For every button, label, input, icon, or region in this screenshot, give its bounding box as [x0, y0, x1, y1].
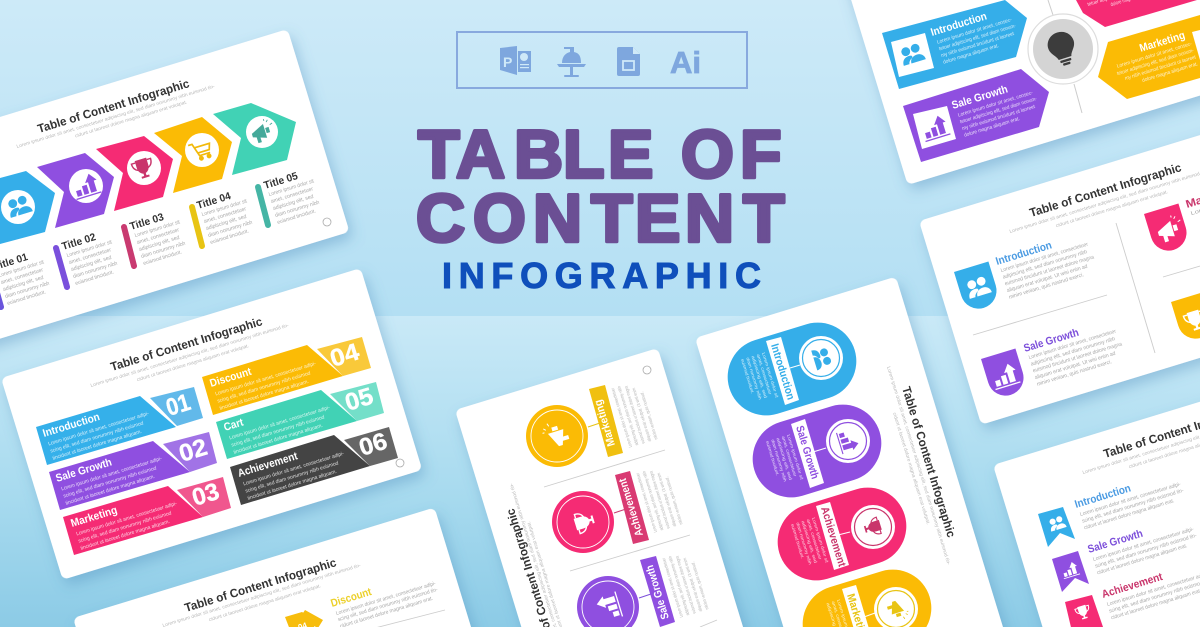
item: marketing circle: aliquam erat volutpat. Ut wisi enim [631, 387, 652, 442]
title 01 column [0, 247, 54, 307]
title 05 column: diam nonummy nibh [274, 200, 320, 219]
item: sale growth circle: euismod tincidunt ut laoreet dolore magna [674, 555, 697, 614]
title 02 column: Title 02 [60, 231, 97, 253]
hexagon 3: trophy [96, 136, 173, 211]
background upper band [0, 0, 1200, 316]
ribbon 06 achievement: tincidunt ut laoreet dolore magna aliquam. [247, 469, 338, 502]
pill: achievement: adipiscing elit, sed [801, 520, 818, 564]
title 05 column: Title 05 [262, 170, 299, 192]
item: sale growth circle: aliquam erat volutpat. Ut wisi enim [682, 557, 703, 612]
item: sale growth circle: Sale Growth [644, 563, 672, 621]
pill: introduction: adipiscing elit, sed [751, 355, 768, 399]
ribbon 03 marketing [63, 477, 231, 555]
ribbon 04 discount: tincidunt ut laoreet dolore magna aliquam. [219, 379, 310, 412]
title 04 column: amet, consectetuer [203, 206, 247, 225]
item: marketing circle: minim veniam, quis nostrud. [639, 391, 659, 440]
icon: Keynote [557, 47, 586, 77]
pill: introduction [718, 313, 866, 425]
item: achievement circle: minim veniam, quis nostrud. [664, 476, 684, 525]
title 05 column: adipiscing elit, sed [272, 194, 314, 212]
blue tab: introduction: dolore magna aliquam erat. [942, 43, 1000, 66]
item: marketing circle: adipiscing elit, sed diam nonummy nibh [616, 385, 639, 446]
hexagon 2: chart [37, 153, 114, 228]
title 01 column: diam nonummy nibh [4, 281, 50, 300]
yellow tab: marketing: Marketing [1138, 30, 1187, 55]
ribbon 01 introduction: tincidunt ut laoreet dolore magna aliquam. [52, 429, 143, 462]
heading: shield slide: Table of Content Infographic [1028, 160, 1183, 220]
ribbon 06 achievement: Achievement [236, 450, 299, 480]
pill: introduction: amet, consectetuer [756, 353, 773, 396]
title 05 column: amet, consectetuer [270, 186, 314, 205]
pill: achievement: amet, consectetuer [806, 518, 823, 561]
title 03 column: amet, consectetuer [136, 227, 180, 246]
item: achievement circle: Achievement [617, 476, 646, 538]
item: introduction shield: euismod tincidunt ut laoreet dolore magna [1004, 254, 1095, 287]
pill: sale growth: Lorem ipsum dolor sit [786, 434, 805, 481]
ribbon 03 marketing: Marketing [69, 504, 119, 530]
ribbon 01 introduction: Introduction [41, 411, 102, 440]
title 05 column [258, 166, 324, 226]
pill: achievement [768, 478, 916, 590]
item: sale growth circle: minim veniam, quis nostrud. [690, 561, 710, 610]
pill: sale growth: adipiscing elit, sed [776, 437, 793, 481]
icon: Illustrator: Ai [670, 45, 701, 80]
panel: bookmark slide (bottom right) [993, 371, 1200, 627]
title 05 column: euismod tincidunt. [277, 208, 317, 226]
software icons box [457, 32, 747, 88]
panel: shield slide (right) [919, 104, 1200, 425]
ribbon 01 introduction: Lorem ipsum dolor sit amet, consectetuer adipi- [48, 411, 150, 447]
ribbon 03 marketing: scing elit, sed diam nonummy nibh euismod [78, 510, 172, 545]
title 02 column [56, 227, 122, 287]
item: marketing circle: Marketing [592, 398, 618, 448]
item: sale growth shield: adipiscing elit, sed diam nonummy nibh [1030, 336, 1116, 368]
ribbon 01 introduction: 01 [163, 389, 194, 422]
ribbon 01 introduction [36, 387, 203, 465]
item: achievement circle: aliquam erat volutpat. Ut wisi enim [656, 472, 677, 527]
icon: yellow chevron 04 [285, 610, 323, 627]
item: sale growth shield: Lorem ipsum dolor sit amet, consectetuer [1028, 329, 1117, 361]
item: achievement circle: euismod tincidunt ut laoreet dolore magna [648, 470, 671, 529]
purple tab: sale growth: Lorem ipsum dolor sit amet, consec- [957, 90, 1034, 119]
item: achievement circle: adipiscing elit, sed diam nonummy nibh [641, 470, 664, 531]
item: sale growth shield: euismod tincidunt ut laoreet dolore magna [1032, 341, 1123, 374]
item: sale growth circle [577, 549, 710, 627]
background lower band [0, 316, 1200, 627]
item: introduction shield: adipiscing elit, sed diam nonummy nibh [1002, 249, 1088, 281]
subtitle: hexagon slide: Lorem ipsum dolor sit amet, consectetuer adipiscing elit, sed diam nonummy nibh euismod tin- [16, 84, 216, 150]
item: sale growth bookmark: Lorem ipsum dolor sit amet, consectetuer adipi- [1092, 526, 1195, 563]
title 01 column: adipiscing elit, sed [2, 275, 44, 293]
item: marketing circle: euismod tincidunt ut laoreet dolore magna [623, 385, 646, 444]
item: sale growth circle: adipiscing elit, sed diam nonummy nibh [667, 555, 690, 616]
icon: PowerPoint [500, 46, 531, 75]
item: marketing circle: Lorem ipsum dolor sit amet, consectetuer [610, 387, 633, 448]
ribbon 05 cart: scing elit, sed diam nonummy nibh euismod [231, 414, 325, 449]
item: introduction shield: aliquam erat volutpat. Ut wisi enim ad [1006, 264, 1088, 294]
blue tab: introduction [882, 0, 1027, 89]
item: sale growth shield: aliquam erat volutpat. Ut wisi enim ad [1034, 351, 1116, 381]
heading: pills slide: Table of Content Infographic [899, 385, 959, 539]
heading: hexagon slide: Table of Content Infographic [36, 76, 191, 136]
item: sale growth bookmark: Sale Growth [1086, 528, 1145, 556]
ribbon 05 cart: Lorem ipsum dolor sit amet, consectetuer adipi- [229, 405, 331, 441]
item: introduction bookmark: Introduction [1073, 482, 1133, 511]
item: introduction bookmark [1038, 468, 1187, 547]
title 04 column: diam nonummy nibh [207, 220, 253, 239]
panel: hexagon arrows slide [0, 29, 350, 349]
pill: sale growth: diam nonummy nibh [770, 439, 788, 483]
item: sale growth shield: Sale Growth [1022, 327, 1081, 355]
hexagon 4: cart [154, 117, 232, 193]
title line: TABLE OF: TABLE OF [418, 116, 782, 192]
title 02 column: diam nonummy nibh [72, 261, 118, 280]
ribbon 04 discount: Lorem ipsum dolor sit amet, consectetuer adipi- [215, 361, 317, 397]
item: introduction shield: Lorem ipsum dolor sit amet, consectetuer [1000, 242, 1089, 274]
title 03 column: Lorem ipsum dolor sit [134, 219, 181, 239]
title 05 column: Lorem ipsum dolor sit [268, 178, 315, 198]
title 02 column: adipiscing elit, sed [70, 255, 112, 273]
ribbon 04 discount: Discount [208, 366, 253, 390]
item: trophy shield [1171, 291, 1200, 343]
icon: copyright mark [323, 218, 331, 226]
item: marketing circle [526, 379, 659, 467]
main title [416, 116, 785, 256]
title 04 column: adipiscing elit, sed [205, 214, 247, 232]
title 02 column: Lorem ipsum dolor sit [66, 239, 113, 259]
ribbon 02 sale growth: Sale Growth [54, 456, 114, 485]
title 02 column: amet, consectetuer [68, 247, 112, 266]
pill: achievement: Lorem ipsum dolor sit [811, 517, 830, 564]
yellow tab: marketing: Lorem ipsum dolor sit amet, consec- [1116, 41, 1193, 70]
title 03 column: adipiscing elit, sed [138, 235, 180, 253]
title 03 column: euismod tincidunt. [143, 249, 183, 267]
item: discount [329, 567, 441, 627]
pill: sale growth [743, 395, 891, 507]
ribbon 02 sale growth [49, 432, 217, 510]
item: sale growth circle: Lorem ipsum dolor sit amet, consectetuer [661, 557, 684, 618]
subtitle: shield slide: Lorem ipsum dolor sit amet, consectetuer adipiscing elit, sed diam nonummy nibh euismod tin- [1009, 169, 1200, 235]
item: introduction bookmark: cidunt ut laoreet dolore magna aliquam erat. [1083, 498, 1175, 531]
purple tab: sale growth: my nibh euismod tincidunt ut laoreet [961, 104, 1036, 132]
blue tab: introduction: my nibh euismod tincidunt ut laoreet [940, 31, 1015, 59]
subtitle: discount slide: cidunt ut laoreet dolore magna aliquam erat volutpat. [208, 583, 322, 623]
purple tab: sale growth: dolore magna aliquam erat. [963, 116, 1021, 139]
ribbon 06 achievement: 06 [356, 428, 391, 462]
icon: Google Slides [617, 47, 640, 76]
item: achievement bookmark [1065, 558, 1200, 627]
pill: introduction: euismod tincidunt. [740, 358, 755, 394]
pink tab: top [1076, 0, 1197, 27]
title 03 column [124, 207, 190, 267]
pill: sale growth: amet, consectetuer [781, 435, 798, 478]
title 04 column: Title 04 [195, 190, 232, 212]
blue tab: introduction: Lorem ipsum dolor sit amet, consec- [936, 17, 1013, 46]
item: achievement circle: Lorem ipsum dolor sit amet, consectetuer [635, 472, 658, 533]
ribbon 04 discount: 04 [327, 338, 363, 373]
subtitle: INFOGRAPHIC: INFOGRAPHIC [442, 255, 761, 296]
title 01 column: euismod tincidunt. [7, 289, 47, 307]
pill: introduction: diam nonummy nibh [745, 357, 763, 401]
title line: CONTENT: CONTENT [416, 180, 785, 256]
pill: achievement: euismod tincidunt. [790, 523, 805, 559]
ribbon 02 sale growth: tincidunt ut laoreet dolore magna aliquam. [65, 474, 156, 507]
ribbon 05 cart [216, 382, 384, 459]
subtitle: shield slide: cidunt ut laoreet dolore magna aliquam erat volutpat. [1055, 189, 1169, 229]
ribbon 02 sale growth: Lorem ipsum dolor sit amet, consectetuer adipi- [61, 456, 163, 492]
title 04 column: euismod tincidunt. [210, 228, 250, 246]
item: introduction shield [954, 229, 1099, 313]
icon: copyright mark [396, 459, 404, 467]
title 03 column: Title 03 [128, 211, 165, 233]
subtitle: ribbons slide: Lorem ipsum dolor sit amet, consectetuer adipiscing elit, sed diam nonummy nibh euismod tin- [90, 323, 290, 389]
pill: achievement: Achievement [818, 505, 848, 568]
pill: introduction: Introduction [768, 342, 797, 402]
ribbon 05 cart: 05 [342, 383, 377, 417]
item: introduction bookmark: Lorem ipsum dolor sit amet, consectetuer adipi- [1079, 481, 1182, 518]
pill: sale growth: Sale Growth [793, 424, 821, 481]
icon: trophy on shield [1183, 308, 1200, 332]
ribbon 02 sale growth: scing elit, sed diam nonummy nibh euismod [63, 465, 157, 500]
item: sale growth bookmark [1052, 513, 1200, 592]
blue tab: introduction: Introduction [929, 10, 989, 39]
item: introduction bookmark: scing elit, sed diam nonummy nibh euismod tin- [1081, 488, 1185, 525]
item: discount: scing elit, sed diam nonummy nibh euismod tin- [337, 587, 439, 623]
icon: copyright mark [643, 366, 651, 374]
pill: sale growth: euismod tincidunt. [765, 440, 780, 476]
pill: achievement: diam nonummy nibh [795, 522, 813, 566]
ribbon 03 marketing: 03 [189, 478, 223, 512]
item: achievement bookmark: Achievement [1100, 571, 1164, 601]
panel: numbered ribbons slide [1, 268, 422, 580]
title 04 column [192, 186, 257, 246]
item: sale growth shield: minim veniam, quis nostrud exerci. [1036, 359, 1113, 388]
item: discount: Discount [329, 586, 373, 610]
title 04 column: Lorem ipsum dolor sit [201, 198, 248, 218]
subtitle: ribbons slide: cidunt ut laoreet dolore magna aliquam erat volutpat. [136, 343, 250, 383]
panel: pills slide (centre right) [695, 277, 1019, 627]
purple tab: sale growth: Sale Growth [950, 83, 1010, 112]
ribbon 03 marketing: tincidunt ut laoreet dolore magna aliquam. [80, 519, 171, 552]
subtitle: pills slide: Lorem ipsum dolor sit amet, consectetuer adipiscing elit, sed diam nonummy nibh euismod tin- [885, 366, 951, 566]
item: sale growth shield [981, 316, 1127, 400]
item: sale growth bookmark: cidunt ut laoreet dolore magna aliquam erat. [1096, 543, 1188, 576]
heading: discount slide: Table of Content Infographic [183, 555, 338, 615]
ribbon 04 discount [202, 337, 371, 415]
yellow tab: marketing [1098, 15, 1200, 99]
subtitle: pills slide: cidunt ut laoreet dolore magna aliquam erat volutpat. [891, 412, 931, 525]
ribbon 05 cart: Cart [222, 416, 245, 434]
pill: introduction: Lorem ipsum dolor sit [761, 352, 780, 399]
ribbon 01 introduction: scing elit, sed diam nonummy nibh euismod [50, 420, 144, 455]
heading: ribbons slide: Table of Content Infographic [109, 314, 264, 374]
item: introduction shield: minim veniam, quis nostrud exerci. [1008, 272, 1085, 301]
hexagon 1: users [0, 171, 55, 244]
subtitle: hexagon slide: cidunt ut laoreet dolore magna aliquam erat volutpat. [74, 99, 188, 139]
ribbon 02 sale growth: 02 [176, 434, 211, 468]
item: achievement circle [552, 464, 684, 553]
purple tab: sale growth: tetuer adipiscing elit, sed diam nonum- [959, 96, 1038, 125]
icon: light bulb [1028, 14, 1098, 84]
ribbon 06 achievement: Lorem ipsum dolor sit amet, consectetuer adipi- [243, 451, 345, 487]
item: marketing shield [1144, 172, 1200, 255]
ribbon 03 marketing: Lorem ipsum dolor sit amet, consectetuer adipi- [76, 501, 178, 537]
pill: marketing [793, 560, 941, 627]
panel: discount slide (bottom left) [73, 507, 522, 627]
title 01 column: amet, consectetuer [0, 267, 44, 286]
ribbon 04 discount: scing elit, sed diam nonummy nibh euismod [217, 370, 311, 405]
title 03 column: diam nonummy nibh [140, 241, 186, 260]
ribbon 06 achievement: scing elit, sed diam nonummy nibh euismod [245, 460, 339, 495]
panel: circles slide (bottom centre) [455, 348, 775, 627]
ribbon 05 cart: tincidunt ut laoreet dolore magna aliquam. [233, 423, 324, 456]
item: introduction shield: Introduction [994, 239, 1054, 268]
hexagon 5: megaphone [213, 103, 296, 175]
ribbon 06 achievement [230, 427, 398, 505]
icon: PowerPoint: P [503, 54, 512, 70]
panel: bulb slide (top right) [820, 0, 1200, 185]
purple tab: sale growth [903, 69, 1049, 162]
item: discount: Lorem ipsum dolor sit amet, consectetuer adipi- [335, 581, 437, 617]
blue tab: introduction: tetuer adipiscing elit, sed diam nonum- [938, 23, 1017, 52]
title 02 column: euismod tincidunt. [75, 269, 115, 287]
